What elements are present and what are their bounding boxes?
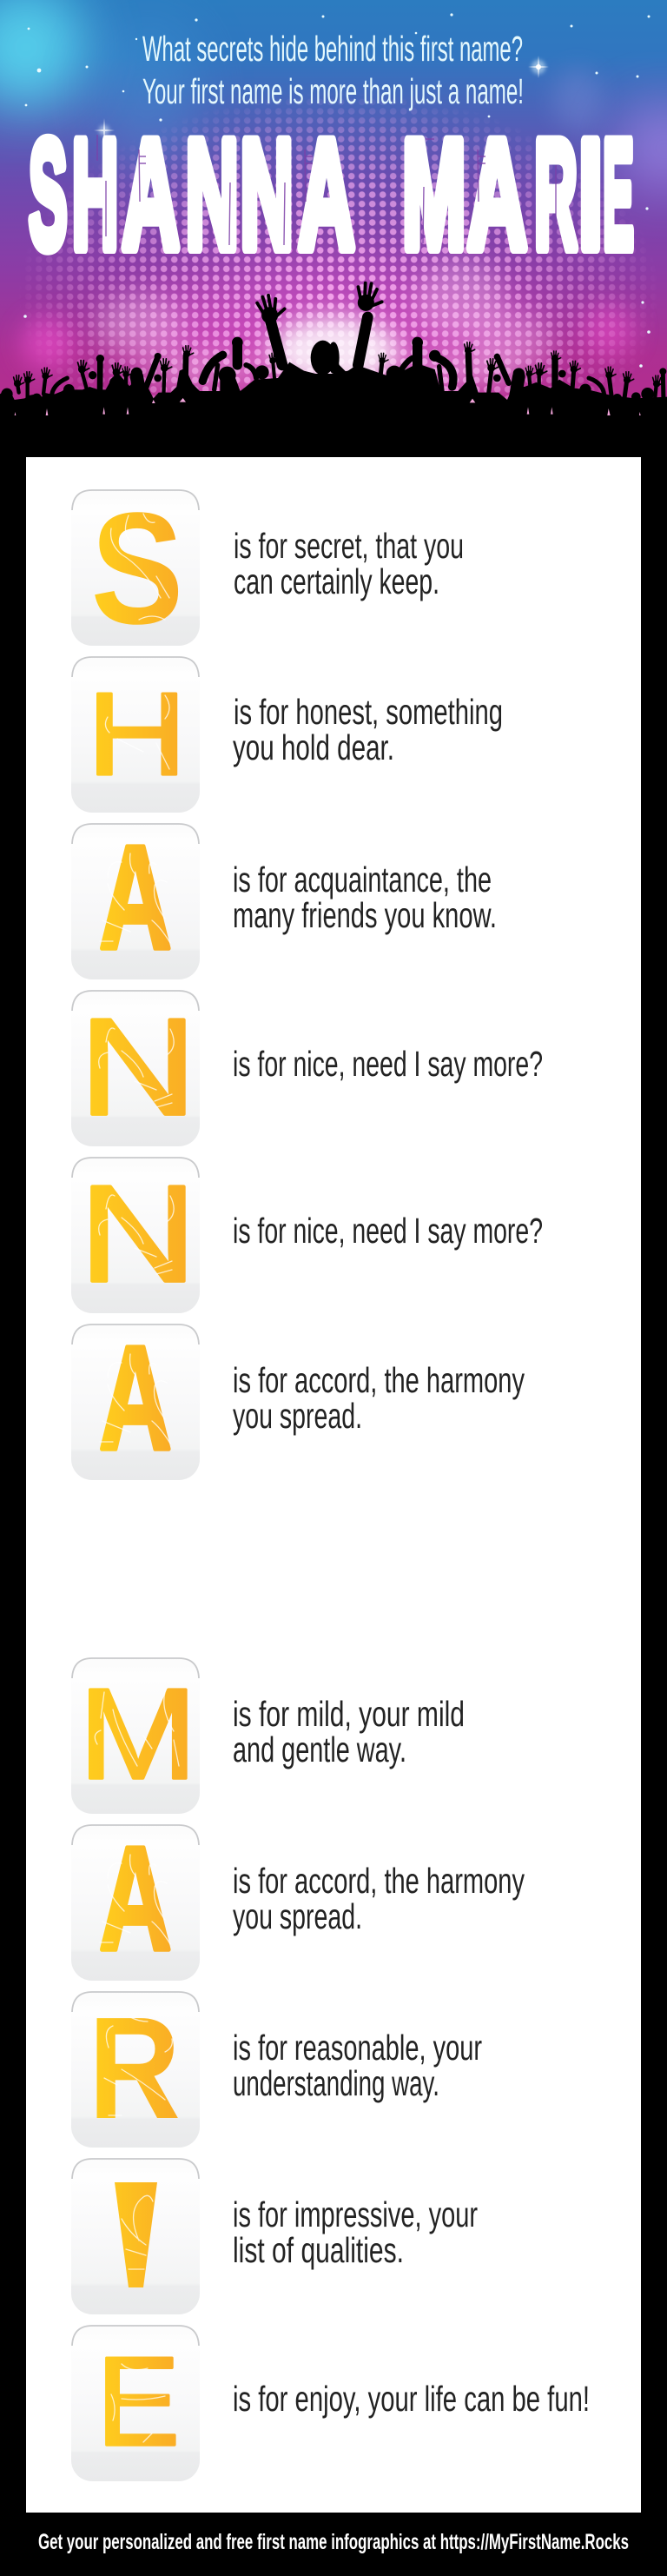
name title: I	[578, 108, 603, 281]
caption I	[233, 2194, 478, 2270]
letter A: A	[99, 1315, 172, 1480]
caption R: understanding way.	[233, 2063, 439, 2103]
name title: A	[299, 108, 354, 281]
letter card M	[71, 1657, 200, 1814]
letter card I	[71, 2158, 200, 2314]
caption A	[233, 1861, 525, 1936]
name title: A	[122, 108, 180, 281]
letter H: H	[87, 669, 187, 800]
white content panel	[26, 457, 641, 2513]
caption S	[234, 526, 464, 601]
caption H: is for honest, something	[234, 692, 503, 732]
letter card R	[71, 1991, 200, 2148]
letter I: I	[93, 2149, 180, 2320]
row: E	[71, 2325, 590, 2481]
row: A	[71, 814, 497, 979]
caption R: is for reasonable, your	[233, 2028, 482, 2068]
letter A: A	[99, 1816, 172, 1981]
letter card S	[71, 489, 200, 646]
letter card H	[71, 656, 200, 813]
banner background lights	[0, 0, 667, 435]
letter card A	[71, 1824, 200, 1981]
caption I: is for impressive, your	[233, 2194, 478, 2234]
title distress marks	[97, 135, 556, 245]
letter card A	[71, 823, 200, 979]
crowd silhouette	[0, 282, 667, 461]
caption N: is for nice, need I say more?	[233, 1044, 543, 1084]
caption A: is for accord, the harmony	[233, 1861, 525, 1901]
row: H	[71, 656, 503, 813]
caption A: you spread.	[233, 1396, 362, 1436]
crowd right half	[327, 282, 667, 435]
caption I: list of qualities.	[233, 2230, 404, 2270]
row: S	[71, 480, 464, 657]
caption N: is for nice, need I say more?	[233, 1211, 543, 1251]
row: I	[71, 2149, 478, 2320]
letter I	[115, 2182, 157, 2287]
letter M: M	[78, 1663, 197, 1806]
caption H: you hold dear.	[233, 727, 394, 767]
row: R	[71, 1988, 482, 2149]
intro text	[142, 29, 524, 111]
letter card N	[71, 1157, 200, 1313]
row: M	[71, 1657, 465, 1814]
caption M: and gentle way.	[233, 1730, 406, 1769]
name title: N	[240, 108, 294, 281]
caption S: can certainly keep.	[234, 561, 439, 601]
letter S: S	[91, 480, 183, 657]
letter R: R	[89, 1988, 181, 2149]
row: A	[71, 1315, 525, 1480]
crowd left half	[0, 292, 335, 435]
name title: N	[185, 108, 239, 281]
letter A: A	[99, 814, 172, 979]
letter N: N	[79, 990, 197, 1144]
name title: H	[72, 108, 118, 281]
caption A: is for accord, the harmony	[233, 1360, 525, 1400]
caption A: you spread.	[233, 1896, 362, 1936]
caption R	[233, 2028, 482, 2103]
name title: A	[467, 108, 527, 281]
name title: M	[402, 108, 466, 281]
letter card E	[71, 2325, 200, 2481]
caption M	[233, 1694, 465, 1769]
row: N	[71, 1157, 543, 1313]
name title: S	[29, 108, 68, 281]
caption M: is for mild, your mild	[233, 1694, 465, 1734]
row: N	[71, 990, 543, 1146]
caption A	[233, 860, 497, 935]
letter card N	[71, 990, 200, 1146]
stars	[23, 13, 650, 368]
letter card A	[71, 1324, 200, 1480]
caption H	[233, 692, 503, 767]
letter E: E	[96, 2331, 180, 2472]
header banner	[0, 0, 667, 461]
caption A	[233, 1360, 525, 1436]
letter N: N	[79, 1157, 197, 1311]
name title: R	[534, 108, 578, 281]
name title	[29, 108, 634, 281]
caption A: many friends you know.	[233, 895, 497, 935]
row: A	[71, 1816, 525, 1981]
caption A: is for acquaintance, the	[233, 860, 492, 900]
caption S: is for secret, that you	[234, 526, 464, 566]
